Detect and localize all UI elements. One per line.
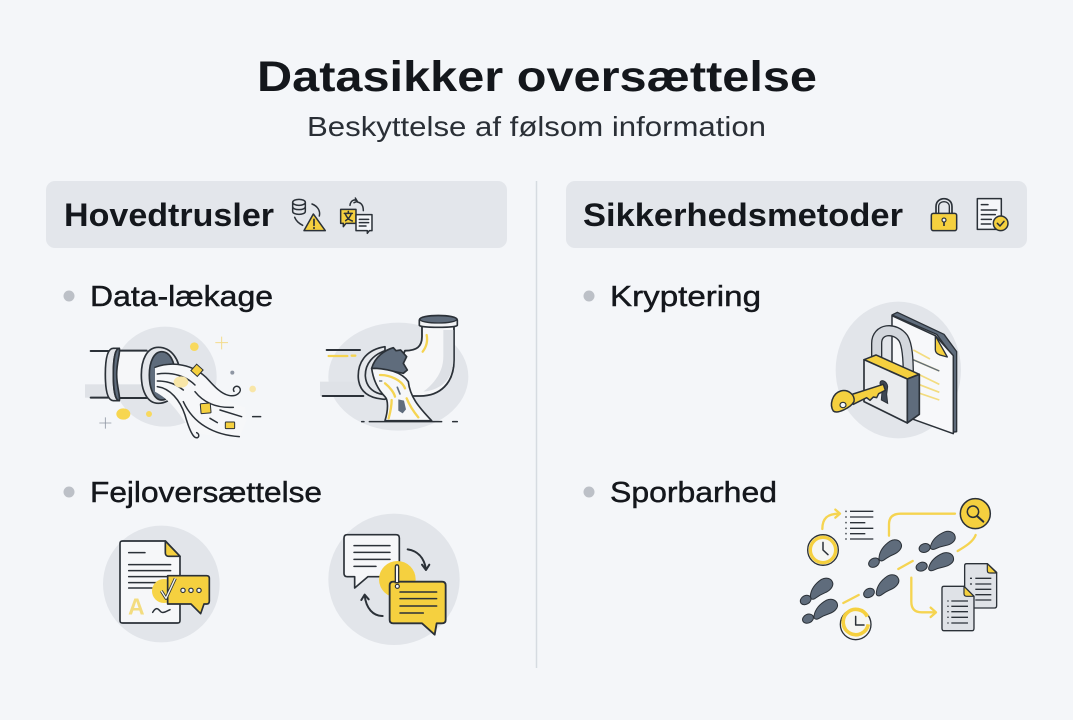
illustration: burst pipe with data flowing out bbox=[85, 327, 261, 438]
panel: Hovedtrusler heading: Hovedtrusler bbox=[64, 197, 274, 233]
illustration: cracked elbow pipe bbox=[320, 315, 468, 431]
icon: database warning bbox=[293, 199, 325, 231]
icon: translation documents bbox=[341, 198, 372, 233]
bullet: Sporbarhed: Sporbarhed bbox=[610, 477, 777, 509]
icon: clock with arrow bbox=[840, 609, 871, 640]
icon: search bbox=[960, 499, 990, 529]
title: Datasikker oversættelse bbox=[257, 53, 817, 101]
illustration: footprints, clocks, search and documents trail bbox=[799, 499, 997, 640]
icon: padlock bbox=[931, 199, 957, 231]
icon: certified document bbox=[977, 199, 1008, 231]
illustration: two chat bubbles exchanging bbox=[328, 514, 460, 645]
subtitle: Beskyttelse af følsom information bbox=[307, 111, 766, 142]
panel: Sikkerhedsmetoder heading: Sikkerhedsmetoder bbox=[583, 197, 903, 233]
bullet: Fejloversættelse: Fejloversættelse bbox=[90, 477, 322, 509]
illustration: reviewed document with chat bubble: A bbox=[128, 594, 145, 620]
illustration: padlock, key and document bbox=[832, 302, 961, 438]
bullet: Data-lækage: Data-lækage bbox=[90, 281, 273, 313]
panel: Hovedtrusler heading bbox=[46, 181, 507, 248]
illustration: reviewed document with chat bubble bbox=[103, 526, 220, 642]
icon: clock bbox=[808, 535, 838, 565]
footprints bbox=[799, 529, 957, 625]
panel: Sikkerhedsmetoder heading bbox=[566, 181, 1027, 248]
documents bbox=[942, 564, 997, 631]
list bbox=[845, 511, 873, 539]
bullet: Kryptering: Kryptering bbox=[610, 281, 761, 313]
